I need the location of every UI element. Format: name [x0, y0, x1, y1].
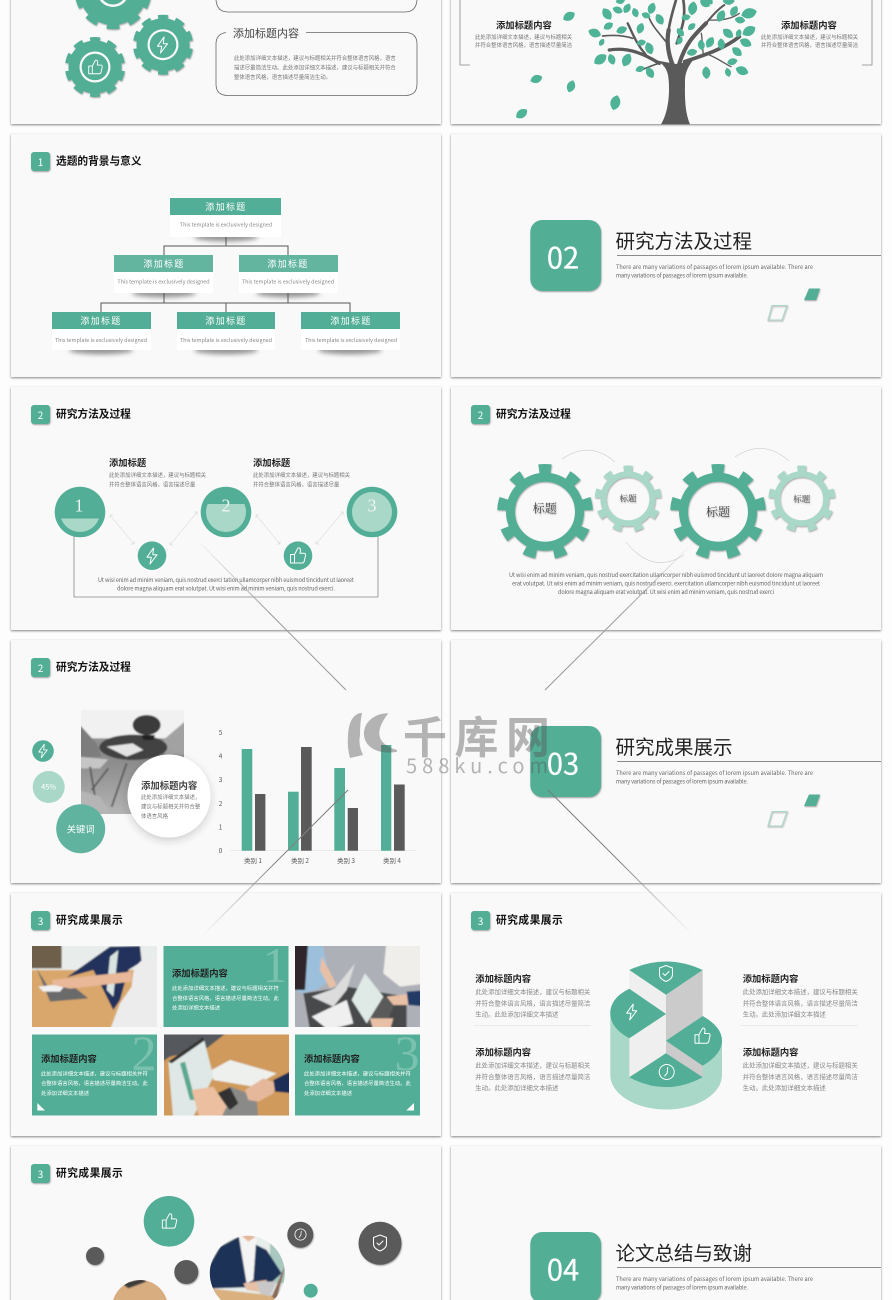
decor: outlined parallelogram: [768, 306, 787, 320]
watermark diagonal lines: [197, 540, 693, 936]
text block: lower right: 生动。此处添加详细文本描述: [743, 1083, 826, 1092]
text block: left: 并符合整体语言风格，语言描述尽量简洁: [475, 41, 573, 49]
number tile 02: [530, 220, 601, 291]
text block: left: 此处添加详细文本描述，建议与标题相关: [475, 33, 573, 41]
panel: method gears: [451, 387, 881, 630]
panel: method chart: [11, 640, 441, 883]
decor: filled parallelogram: [804, 288, 820, 300]
section badge 2: [471, 405, 490, 424]
org node: middle left: [114, 255, 213, 293]
watermark logo and brand: [348, 702, 550, 779]
bar chart: 类别 2: [291, 856, 309, 865]
tile 2: [32, 1025, 157, 1116]
white callout circle: 此处添加详细文本描述，: [141, 793, 200, 801]
chapter description: many variations of passages of lorem ipsum available.: [616, 778, 748, 786]
tile 3: 添加标题内容: [304, 1051, 360, 1065]
text block: lower right: [743, 1045, 858, 1092]
gear 3: 标题: [706, 503, 730, 520]
text block: lower left: [475, 1045, 591, 1092]
section badge 3: 3: [478, 913, 483, 928]
tile 3: 此处添加详细文本描述，建议与标题相关并符: [304, 1070, 412, 1078]
text block: left: 添加标题内容: [496, 18, 552, 32]
org node: top: [170, 198, 281, 237]
right bracket: [862, 0, 872, 65]
title underline: [617, 1266, 881, 1268]
divider right: [741, 1024, 858, 1026]
tile 2: 添加标题内容: [41, 1051, 97, 1065]
photo: pointing at laptop screen: [164, 1034, 289, 1116]
bar chart: 0: [219, 846, 223, 855]
percentage circle: 45%: [41, 782, 56, 792]
org node: middle left: 添加标题: [143, 257, 185, 270]
section badge 3: 3: [38, 1166, 43, 1181]
org node: top: This template is exclusively designed: [180, 220, 272, 228]
falling leaves: [514, 9, 622, 121]
section badge 2: 2: [478, 407, 484, 422]
bubble: shield: [358, 1222, 402, 1265]
description: Ut wisi enim ad minim veniam, quis nostrud exerci tation ullamcorper nibh euismod tincidunt ut laoreet: [98, 576, 355, 584]
chapter description: many variations of passages of lorem ipsum available.: [616, 272, 748, 280]
text block: step 1: 添加标题: [109, 455, 147, 469]
gear 1: 标题: [533, 500, 557, 516]
text block: right: 此处添加详细文本描述，建议与标题相关: [761, 33, 859, 41]
tile 1: 处添加详细文本描述: [172, 1004, 221, 1012]
tile 1: 此处添加详细文本描述，建议与标题相关并符: [172, 984, 280, 992]
text block: upper right: 并符合整体语言风格，语言描述尽量简洁: [743, 998, 858, 1008]
illustration: tree: [587, 0, 758, 124]
decor: filled parallelogram: [804, 794, 820, 806]
icon: lightning circle: [138, 541, 166, 570]
keyword circle: [56, 804, 105, 853]
bubble: clock: [287, 1222, 313, 1248]
chapter title: 研究成果展示: [616, 731, 733, 760]
panel: method process circles: [11, 387, 441, 630]
chapter description: many variations of passages of lorem ipsum available.: [616, 1284, 748, 1292]
bar chart: 4: [219, 752, 223, 760]
text block: step 2: 此处添加详细文本描述，建议与标题相关: [253, 471, 351, 479]
white callout circle: [128, 754, 210, 838]
bar chart: 类别 3: [337, 856, 355, 865]
text block: lower left: 并符合整体语言风格，语言描述尽量简洁: [475, 1072, 591, 1081]
org node: bottom left: 添加标题: [80, 314, 122, 327]
tile 2: 合整体语言风格，语言描述尽量简洁生动。此: [41, 1079, 149, 1087]
text block: upper right: 生动。此处添加详细文本描述: [743, 1010, 826, 1018]
bubble: small dark left: [86, 1247, 104, 1265]
number tile 03: [530, 726, 601, 797]
double arrows: [110, 512, 343, 545]
heading: 研究方法及过程: [56, 660, 131, 674]
number tile 02: 02: [547, 236, 579, 278]
org node: bottom middle: 添加标题: [205, 314, 247, 327]
org node: middle right: [239, 255, 338, 293]
decor: outlined parallelogram: [768, 812, 787, 826]
tile 3: 合整体语言风格，语言描述尽量简洁生动。此: [304, 1079, 412, 1087]
section badge 3: [31, 1164, 50, 1183]
org node: bottom right: This template is exclusively designed: [305, 336, 397, 344]
panel: chapter 03 divider: [451, 640, 881, 883]
section badge 2: 2: [38, 407, 44, 422]
description: [98, 576, 355, 592]
panel: chapter 02 divider: [451, 134, 881, 377]
step 1 circle: [55, 487, 105, 538]
panel: background and significance: [11, 134, 441, 377]
number tile 04: 04: [547, 1248, 579, 1290]
left bracket: [460, 0, 470, 65]
description: dolore magna aliquam erat volutpat. Ut wisi enim ad minim veniam, quis nostrud exerci.: [117, 584, 335, 592]
white callout circle: 添加标题内容: [141, 778, 198, 792]
description: erat volutpat. Ut wisi enim ad minim veniam, quis nostrud exerci. exercitation ullamcorper nibh euismod tincidunt ut laoreet: [512, 580, 821, 588]
panel: results bubbles: [11, 1146, 441, 1300]
bar chart: 2: [219, 799, 223, 808]
thin arcs: [562, 448, 789, 563]
percentage circle: [33, 771, 65, 803]
tile 1: 1: [262, 937, 288, 993]
text block: lower right: 此处添加详细文本描述，建议与标题相关: [743, 1060, 858, 1070]
chapter title: 研究方法及过程: [616, 225, 752, 254]
text block: right: 并符合整体语言风格，语言描述尽量简洁: [761, 41, 859, 49]
white callout circle: 建议与标题相关并符合整: [141, 802, 201, 810]
chapter description: There are many variations of passages of lorem ipsum available. There are: [616, 263, 813, 271]
tile 3: [295, 1025, 420, 1116]
panel: results photo grid: [11, 893, 441, 1136]
step 2 circle: [200, 487, 252, 537]
icon: lightning gear: [131, 12, 195, 77]
photo bubble: man in suit: [210, 1236, 285, 1300]
text block: step 1: [109, 455, 207, 488]
org node: bottom middle: [177, 312, 275, 350]
text block: step 2: 添加标题: [253, 455, 291, 469]
text block: upper right: [743, 971, 858, 1018]
description: dolore magna aliquam erat volutpat. Ut wisi enim ad minim veniam, quis nostrud exerci: [558, 588, 774, 596]
bar chart: [219, 728, 416, 865]
chapter description: There are many variations of passages of lorem ipsum available. There are: [616, 1275, 813, 1283]
bar chart: 类别 1: [244, 856, 262, 865]
description: [509, 571, 823, 596]
step 1 circle: 1: [74, 496, 84, 516]
heading: 研究方法及过程: [496, 406, 571, 422]
keyword circle: 关键词: [67, 822, 95, 836]
tile 3: 处添加详细文本描述: [304, 1089, 353, 1097]
chapter description: [616, 263, 813, 280]
white callout circle: 体语言风格: [141, 812, 169, 820]
text block: lower right: 添加标题内容: [743, 1045, 799, 1059]
bar chart: 1: [219, 822, 223, 832]
section badge 1: [31, 152, 50, 171]
icon: thumbs up gear: [63, 35, 127, 99]
org node: bottom right: [301, 312, 400, 350]
text block: lower left: 添加标题内容: [475, 1045, 532, 1059]
bar chart: 3: [219, 775, 223, 784]
photo: team with laptops: [295, 946, 420, 1027]
step 2 circle: 2: [222, 496, 230, 516]
chapter description: [616, 1275, 813, 1292]
text block: step 1: 并符合整体语言风格，语言描述尽量: [109, 480, 196, 488]
text block: upper left: [475, 971, 591, 1018]
text block: lower right: 并符合整体语言风格，语言描述尽量简洁: [743, 1072, 858, 1081]
icon: lightning circle: [32, 740, 54, 762]
section badge 1: 1: [38, 154, 43, 169]
gear 2: 标题: [619, 492, 637, 504]
org node: middle right: 添加标题: [267, 257, 309, 270]
text block: step 1: 此处添加详细文本描述，建议与标题相关: [109, 471, 207, 479]
isometric cylinder: [610, 962, 722, 1110]
bubble: medium dark: [174, 1260, 198, 1284]
photo: colleagues at laptop: [32, 946, 157, 1027]
org node: top: 添加标题: [205, 200, 247, 213]
panel: chapter 04 divider: [451, 1146, 881, 1300]
panel: results cylinder: [451, 893, 881, 1136]
chapter description: [616, 769, 813, 786]
section badge 2: 2: [38, 660, 44, 675]
bubble: small teal: [304, 1284, 318, 1298]
tile 2: 2: [132, 1025, 156, 1081]
number tile 04: [530, 1232, 601, 1300]
icon: top gear: [71, 0, 155, 33]
panel: gears and text boxes slide: [11, 0, 441, 124]
gear 3: [669, 463, 767, 560]
org chart: [52, 198, 400, 354]
gear 1: [496, 463, 594, 560]
text block: left: [475, 18, 573, 49]
bubble: thumbs up: [144, 1196, 194, 1247]
chapter description: There are many variations of passages of lorem ipsum available. There are: [616, 769, 813, 777]
gear 4: 标题: [793, 493, 811, 505]
step 3 circle: [347, 487, 397, 537]
tile 2: 此处添加详细文本描述，建议与标题相关并符: [41, 1070, 149, 1078]
org node: bottom left: [52, 312, 151, 350]
org node: middle left: This template is exclusively designed: [117, 278, 210, 286]
text box: lower with heading: 描述尽量简洁生动。此处添加详细文本描述，建议与标题相关并符合: [234, 64, 396, 72]
description: Ut wisi enim ad minim veniam, quis nostrud exercitation ullamcorper nibh euismod tincidunt ut laoreet dolore magna aliquam: [509, 571, 823, 579]
tile 1: 合整体语言风格，语言描述尽量简洁生动。此: [172, 994, 280, 1002]
section badge 2: [31, 658, 50, 677]
panel: tree slide: [451, 0, 881, 124]
text block: lower left: 此处添加详细文本描述，建议与标题相关: [475, 1060, 591, 1070]
heading: 研究成果展示: [56, 912, 123, 928]
title underline: [617, 254, 881, 256]
icon: thumbs up circle: [284, 541, 312, 570]
text box: lower with heading: [216, 25, 417, 96]
heading: 研究成果展示: [56, 1166, 123, 1180]
photo bubble: table: [113, 1280, 167, 1300]
text block: upper right: 此处添加详细文本描述，建议与标题相关: [743, 987, 858, 996]
text block: upper left: 添加标题内容: [475, 971, 532, 985]
section badge 3: [471, 911, 490, 930]
text box: upper outline: [216, 0, 417, 12]
number tile 03: 03: [547, 742, 579, 784]
text block: upper left: 并符合整体语言风格，语言描述尽量简洁: [475, 998, 591, 1008]
text block: right: 添加标题内容: [781, 18, 837, 32]
org node: middle right: This template is exclusively designed: [242, 278, 334, 286]
text block: step 2: 并符合整体语言风格，语言描述尽量: [253, 480, 340, 488]
text block: step 2: [253, 455, 351, 488]
photo: meeting table grayscale: [81, 714, 184, 814]
text box: lower with heading: 此处添加详细文本描述，建议与标题相关并符合整体语言风格，语言: [234, 54, 396, 62]
text block: lower left: 生动。此处添加详细文本描述: [475, 1083, 559, 1092]
heading: 研究成果展示: [496, 912, 563, 928]
text block: upper right: 添加标题内容: [743, 971, 799, 985]
text block: right: [761, 18, 859, 49]
divider left: [474, 1024, 591, 1026]
title underline: [617, 760, 881, 762]
tile 1: 添加标题内容: [172, 966, 228, 980]
watermark logo and brand: 588ku.com: [406, 750, 548, 779]
tile 2: 处添加详细文本描述: [41, 1089, 90, 1097]
text box: lower with heading: 添加标题内容: [233, 25, 299, 41]
org node: bottom middle: This template is exclusively designed: [180, 336, 272, 344]
org node: bottom right: 添加标题: [330, 314, 372, 327]
watermark logo and brand: 千库网: [403, 702, 550, 766]
bar chart: 类别 4: [383, 856, 401, 865]
section badge 3: [31, 911, 50, 930]
step 3 circle: 3: [368, 496, 376, 516]
section badge 2: [31, 405, 50, 424]
gear 4: [768, 465, 836, 533]
text block: upper left: 此处添加详细文本描述，建议与标题相关: [475, 987, 591, 996]
text box: lower with heading: 整体语言风格，语言描述尽量简洁生动。: [234, 73, 331, 81]
org node: bottom left: This template is exclusively designed: [55, 336, 147, 344]
text block: upper left: 生动。此处添加详细文本描述: [475, 1010, 559, 1018]
connector frame: [74, 535, 378, 597]
tile 1: [164, 937, 288, 1027]
bar chart: 5: [219, 728, 223, 737]
chapter title: 论文总结与致谢: [616, 1237, 752, 1266]
tile 3: 3: [394, 1025, 420, 1081]
gear 2: [594, 465, 662, 533]
section badge 3: 3: [38, 913, 43, 928]
heading: 研究方法及过程: [56, 406, 131, 422]
heading: 选题的背景与意义: [56, 154, 142, 168]
